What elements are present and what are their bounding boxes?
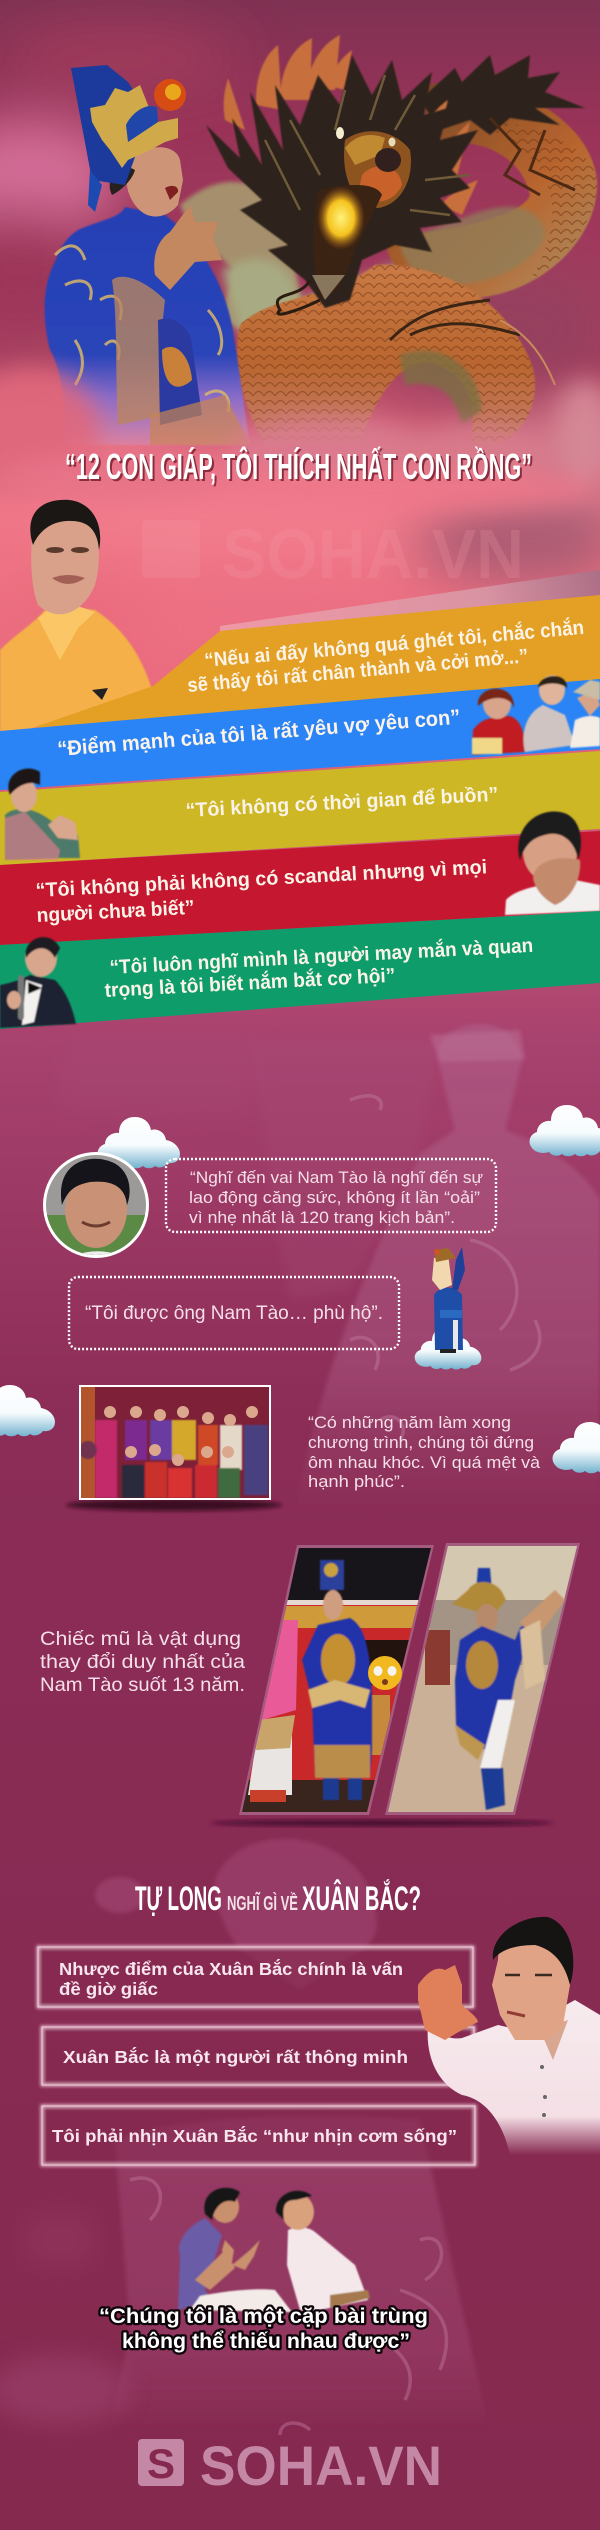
hero illustration: man in Nam Tào costume (45, 65, 250, 445)
photo: man covering mouth (505, 812, 600, 915)
quote text: crying together: hạnh phúc”. (308, 1472, 405, 1491)
footer logo: S (147, 2440, 175, 2487)
photo: cast group (66, 1385, 282, 1511)
ghost robe embroidery lower (130, 2178, 446, 2435)
cloud: top right (530, 1105, 600, 1156)
portrait: smiling man in yellow shirt (0, 500, 155, 735)
text: the hat (40, 1628, 245, 1696)
duo quote: không thể thiếu nhau được” (122, 2330, 410, 2353)
dragon wing and pale sky (180, 182, 300, 335)
heading: Tự Long asks: XUÂN BẮC? (302, 1880, 421, 1918)
ghost figure lower: head and robe (0, 1839, 490, 2430)
band: yellow quote (0, 751, 600, 865)
dragon orange fins (224, 35, 478, 215)
band: red quote (0, 831, 600, 945)
tall blue hat (71, 65, 150, 185)
band: green quote: “Tôi luôn nghĩ mình là người may mắn và quan (109, 933, 534, 979)
cloud: left edge (0, 1385, 55, 1436)
robe embroidery (55, 246, 229, 412)
dragon upper body (385, 82, 597, 298)
ghost figure behind Nam Tào section (60, 1024, 600, 1510)
band: orange quote: sẽ thấy tôi rất chân thành và cởi mở...” (187, 645, 529, 697)
text: the hat: Chiếc mũ là vật dụng (40, 1628, 241, 1650)
text: the hat: thay đổi duy nhất của (40, 1651, 245, 1673)
band: orange quote: “Nếu ai đấy không quá ghét tôi, chắc chắn (203, 615, 585, 672)
statement box 3 (42, 2106, 475, 2165)
photo: man in tuxedo with microphone (0, 937, 76, 1028)
heading: Tự Long asks (135, 1880, 421, 1918)
band: blue quote: “Điểm mạnh của tôi là rất yêu vợ yêu con” (57, 706, 461, 761)
quote box 1: vì nhẹ nhất là 120 trang kịch bản”. (189, 1208, 455, 1227)
statement box 2: Xuân Bắc là một người rất thông minh (63, 2046, 408, 2067)
watermark: faint logo in hero: SOHA.VN (222, 515, 524, 593)
dragon face (344, 131, 411, 208)
band: red quote: “Tôi không phải không có scandal nhưng vì mọi (35, 856, 488, 902)
footer logo: SOHA.VN (200, 2434, 442, 2497)
background smoke clouds (0, 25, 600, 700)
icon: cartoon Nam Tào character (432, 1247, 465, 1353)
photo: Xuân Bắc and Tự Long duo (178, 2188, 370, 2312)
band: green quote: trọng là tôi biết nắm bắt cơ hội” (104, 963, 396, 1002)
quote text: crying together: “Có những năm làm xong (308, 1413, 511, 1432)
quote box 2 (69, 1277, 399, 1349)
band: pale backing stripe (220, 570, 600, 632)
quote text: crying together (308, 1413, 541, 1491)
raised hand (154, 205, 222, 290)
cloud: right edge (553, 1422, 600, 1473)
ghost robe embroidery (350, 1096, 540, 1440)
duo quote: không thể thiếu nhau được” (122, 2330, 410, 2353)
photo: wife, baby and husband (472, 675, 600, 755)
hero foreground smoke (0, 370, 600, 512)
slanted photo: on stage (230, 1545, 440, 1815)
dragon mane (206, 55, 478, 308)
statement box 2 (42, 2027, 474, 2085)
quote box 2: “Tôi được ông Nam Tào… phù hộ”. (85, 1303, 383, 1324)
duo quote: “Chúng tôi là một cặp bài trùng (99, 2305, 428, 2328)
quote box 1: “Nghĩ đến vai Nam Tào là nghĩ đến sự (190, 1168, 483, 1187)
statement box 1: Nhược điểm của Xuân Bắc chính là vấn (59, 1958, 403, 1979)
statement box 1: đề giờ giấc (59, 1979, 158, 1999)
face (127, 147, 183, 217)
dragon lower body (237, 265, 535, 445)
quote box 1: lao động căng sức, không ít lần “oải” (189, 1188, 480, 1207)
robe (45, 207, 250, 445)
heading: Tự Long asks: TỰ LONG (135, 1880, 222, 1918)
band: red quote: người chưa biết” (36, 897, 195, 927)
quote box 1 (166, 1159, 496, 1232)
statement box 1 (38, 1947, 473, 2007)
band: orange quote (38, 595, 600, 735)
shadow under slanted photos (210, 1820, 554, 1826)
statement box 3: Tôi phải nhịn Xuân Bắc “như nhịn cơm sống” (52, 2125, 457, 2146)
duo quote: “Chúng tôi là một cặp bài trùng (99, 2305, 428, 2328)
slanted photo: backstage (380, 1543, 585, 1815)
portrait: Tự Long raising hand (418, 1917, 600, 2155)
text: the hat: Nam Tào suốt 13 năm. (40, 1674, 245, 1696)
cloud: top left (98, 1117, 180, 1168)
quote text: crying together: chương trình, chúng tôi đứng (308, 1433, 534, 1452)
avatar: smiling man (40, 1150, 150, 1262)
quote text: crying together: ôm nhau khóc. Vì quá mệt và (308, 1453, 541, 1472)
dragon jaw (313, 185, 382, 300)
band: yellow quote: “Tôi không có thời gian để buồn” (185, 784, 499, 822)
dragon fireball (317, 186, 365, 250)
cloud: under character (415, 1328, 481, 1369)
band: blue quote (0, 679, 600, 790)
hero illustration: dragon (180, 35, 597, 445)
heading: Tự Long asks: NGHĨ GÌ VỀ (227, 1892, 298, 1915)
band: green quote (0, 911, 600, 1029)
photo: man in floral shirt (5, 769, 80, 860)
duo quote (99, 2305, 428, 2353)
